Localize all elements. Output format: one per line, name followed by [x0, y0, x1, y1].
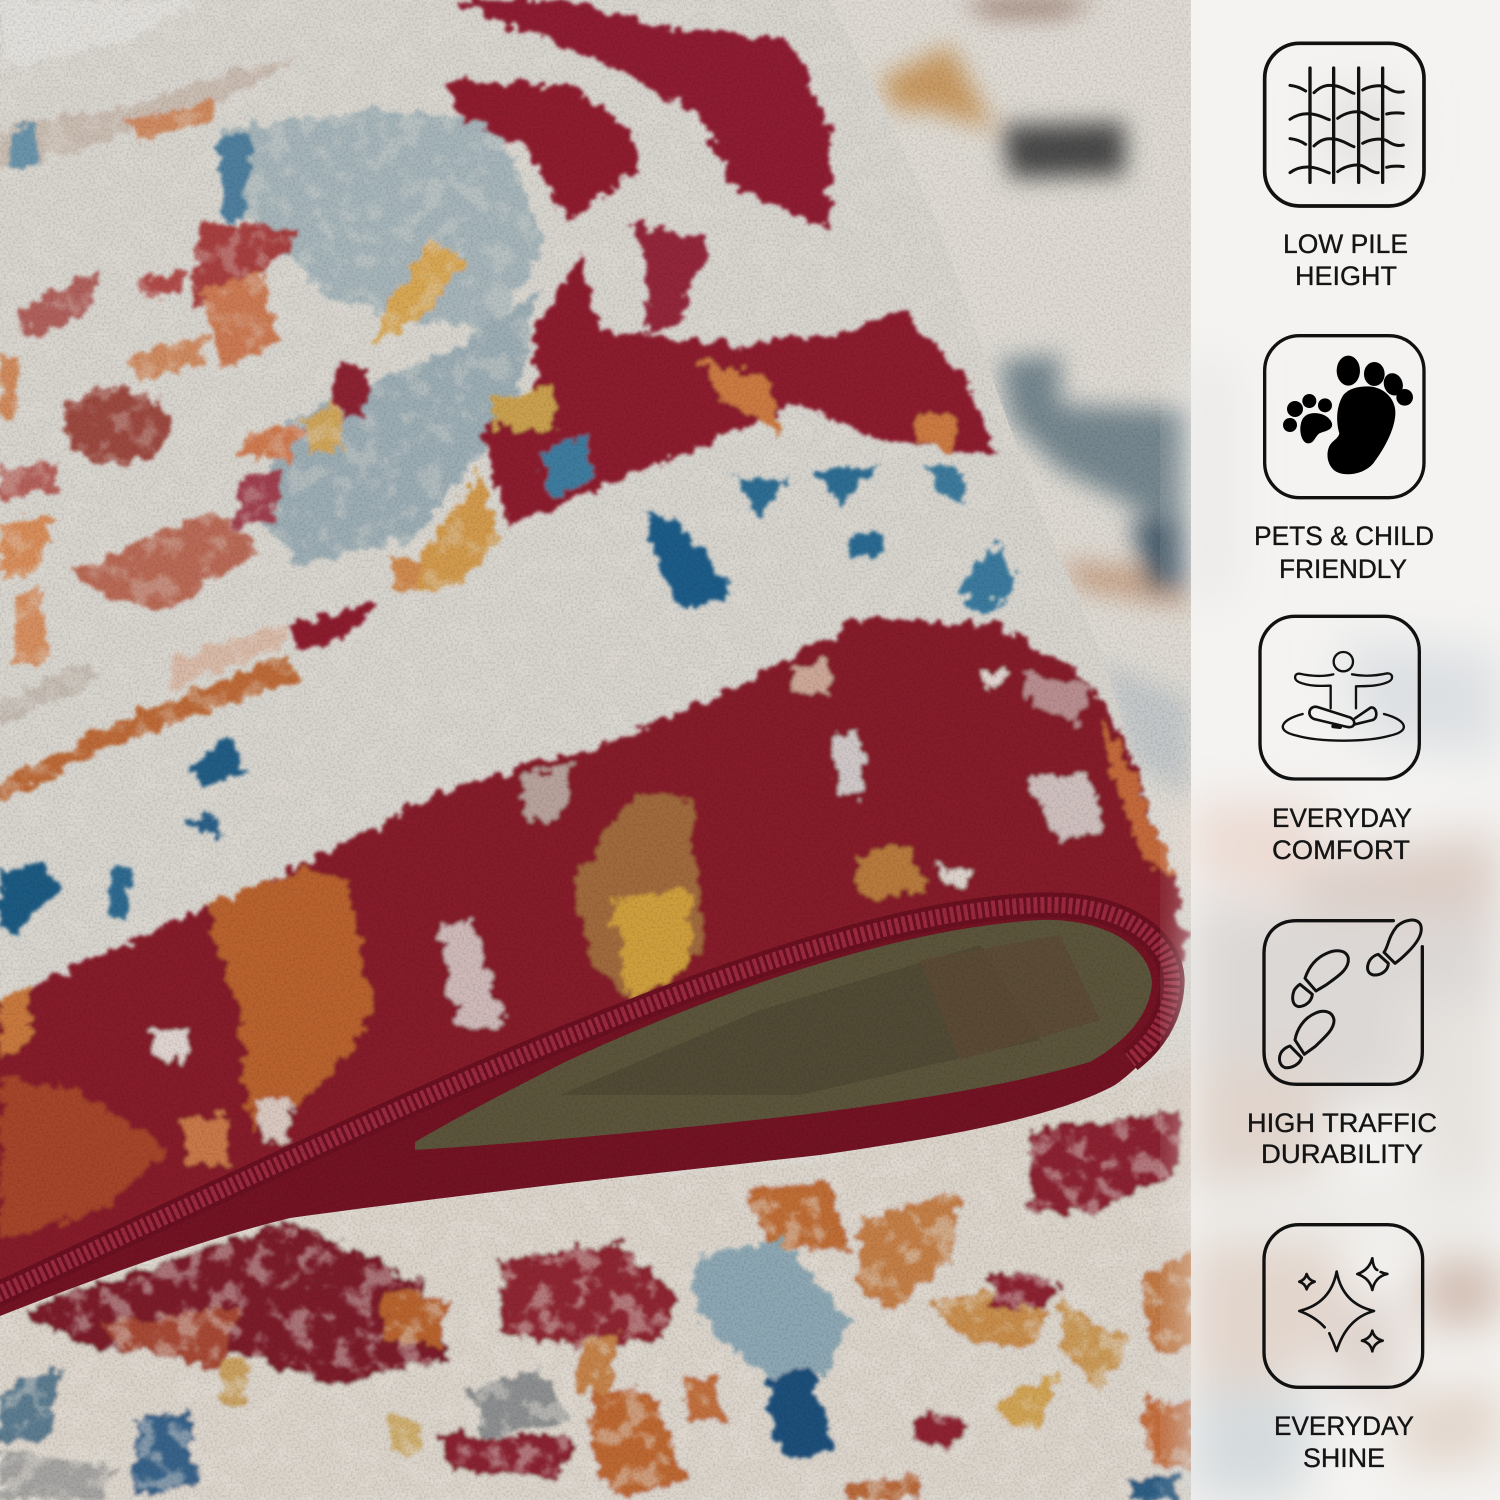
label: everyday shine: SHINE: [1303, 1443, 1385, 1473]
icon: woven pile: [1265, 43, 1424, 206]
icon: sparkles: [1264, 1225, 1423, 1387]
rug photograph: [0, 0, 1192, 1500]
label: high traffic durability: [1247, 1108, 1437, 1169]
floor rug background, upper right: [874, 0, 1191, 785]
feature: pets and child friendly: [1254, 336, 1434, 584]
feature: low pile height: [1265, 43, 1424, 291]
icon: meditating figure: [1260, 616, 1419, 779]
label: everyday comfort: [1272, 803, 1412, 865]
label: everyday comfort: COMFORT: [1272, 835, 1410, 865]
red pile band at the rolled edge: [0, 620, 1185, 1310]
rug underside backing: [415, 920, 1152, 1150]
bottom rug mottled pile: [0, 1108, 1191, 1500]
label: low pile height: LOW PILE: [1283, 229, 1408, 259]
label: everyday comfort: EVERYDAY: [1272, 803, 1412, 833]
rug top surface: [0, 0, 1129, 939]
rug edge piping: [0, 905, 1172, 1298]
feature: everyday comfort: [1260, 616, 1419, 865]
lower edge binding fill: [0, 905, 1172, 1320]
label: everyday shine: [1274, 1411, 1414, 1473]
feature: high traffic durability: [1247, 920, 1437, 1169]
label: pets and child friendly: [1254, 521, 1434, 584]
blue-grey bottom patch: [690, 1240, 850, 1460]
right feature panel: [1191, 0, 1500, 1500]
red and blue patterned shapes: [0, 0, 1015, 930]
label: pets and child friendly: PETS & CHILD: [1254, 521, 1434, 551]
bottom floor rug: [0, 1060, 1192, 1500]
icon: paw and foot: [1265, 336, 1424, 498]
label: low pile height: [1283, 229, 1408, 291]
label: high traffic durability: HIGH TRAFFIC: [1247, 1108, 1437, 1138]
pile grain texture: [0, 0, 1192, 1500]
feature: everyday shine: [1264, 1225, 1423, 1473]
label: pets and child friendly: FRIENDLY: [1279, 554, 1407, 584]
label: low pile height: HEIGHT: [1295, 261, 1397, 291]
pale patterned patches: [0, 0, 545, 800]
label: everyday shine: EVERYDAY: [1274, 1411, 1414, 1441]
label: high traffic durability: DURABILITY: [1261, 1139, 1423, 1169]
icon: footprints: [1264, 920, 1422, 1084]
top surface mottled pile: [0, 66, 543, 802]
